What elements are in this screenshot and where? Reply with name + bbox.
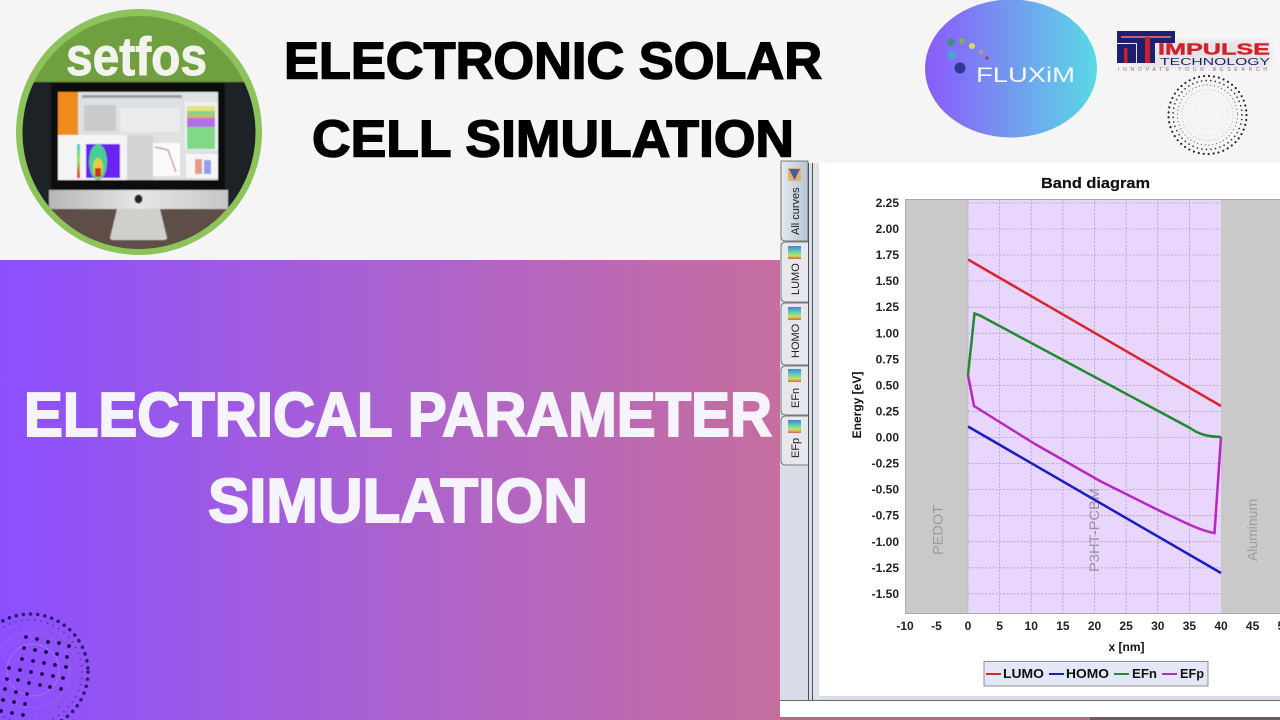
x axis tick labels: 40 [1214, 619, 1228, 633]
logo wordmark: setfos [66, 27, 207, 87]
curve: HOMO [968, 426, 1221, 573]
chart: band diagram [850, 175, 1280, 686]
monitor stand [110, 209, 167, 240]
icon: apple mark [134, 194, 142, 204]
tab: EFp [781, 416, 808, 465]
main heading: ELECTRICAL PARAMETER [24, 381, 772, 450]
monitor chin [49, 190, 228, 209]
logo: Fluxim oval: FLUXiM [976, 63, 1075, 87]
x axis tick labels: -5 [931, 619, 942, 633]
title [284, 32, 822, 168]
y axis tick labels: 0.00 [876, 430, 899, 444]
x axis tick labels: 45 [1246, 619, 1260, 633]
tab: LUMO: LUMO [790, 263, 802, 295]
x axis tick labels: 30 [1151, 619, 1165, 633]
y axis tick labels: -0.50 [872, 482, 899, 496]
y axis tick labels: 0.75 [876, 352, 899, 366]
purple gradient banner [0, 260, 780, 720]
logo: Fluxim oval [925, 0, 1097, 138]
tab: All curves: All curves [790, 187, 802, 235]
x axis tick labels: 0 [965, 619, 972, 633]
x axis tick labels: -10 [896, 619, 914, 633]
legend: LUMO [1003, 666, 1044, 681]
logo: Impulse Technology [1117, 31, 1271, 73]
y axis tick labels: -0.25 [872, 456, 899, 470]
y axis tick labels: 2.00 [876, 222, 899, 236]
tab: EFn: EFn [790, 388, 802, 408]
y axis tick labels: -1.00 [872, 535, 899, 549]
legend: EFp [1180, 666, 1204, 681]
logo: Impulse Technology: INNOVATE YOUR RESEARCH [1118, 67, 1267, 73]
layer: PEDOT region [906, 199, 968, 614]
panel: band diagram window [780, 161, 1280, 720]
y axis tick labels: 0.50 [876, 378, 899, 392]
y axis tick labels: 1.00 [876, 326, 899, 340]
main heading: SIMULATION [208, 467, 588, 536]
tab: HOMO [781, 303, 808, 365]
logo: Impulse Technology: IMPULSE [1158, 42, 1271, 58]
layer label: Aluminum: Aluminum [1244, 499, 1260, 561]
y axis tick labels: -0.75 [872, 508, 899, 522]
y axis tick labels: 1.75 [876, 248, 899, 262]
y axis tick labels [872, 196, 899, 601]
layer: P3HT-PCBM region [968, 199, 1221, 614]
decorative dotted rings: top right [1168, 76, 1246, 154]
x axis title: x [nm] [1108, 640, 1145, 654]
y axis title: Energy [eV] [850, 372, 864, 438]
x axis tick labels: 20 [1088, 619, 1101, 633]
legend [984, 662, 1208, 686]
x axis tick labels: 10 [1025, 619, 1038, 633]
legend: EFn [1132, 666, 1157, 681]
x axis tick labels: 5 [996, 619, 1003, 633]
x axis tick labels: 25 [1119, 619, 1133, 633]
y axis tick labels: 2.25 [876, 196, 899, 210]
title: CELL SIMULATION [312, 110, 794, 168]
logo: setfos monitor badge [16, 9, 262, 259]
y axis tick labels: -1.50 [872, 587, 899, 601]
layer label: P3HT-PCBM: P3HT-PCBM [1086, 488, 1102, 572]
curve: EFp [968, 375, 1221, 533]
x axis tick labels: 15 [1056, 619, 1070, 633]
x axis tick labels [896, 622, 1280, 630]
icon: monitor screen [51, 83, 225, 190]
tab: EFp: EFp [790, 438, 802, 458]
curve: EFn [968, 314, 1221, 437]
tab: EFn [781, 366, 808, 415]
tab: HOMO: HOMO [790, 323, 802, 358]
y axis tick labels: 1.25 [876, 300, 899, 314]
y axis tick labels: 0.25 [876, 404, 899, 418]
decorative dotted rings: bottom left [0, 614, 88, 720]
tab: All curves [781, 161, 808, 241]
logo: Impulse Technology: TECHNOLOGY [1160, 56, 1270, 68]
chart title: Band diagram [1041, 175, 1150, 192]
y axis tick labels: 1.50 [876, 274, 899, 288]
layer label: PEDOT: PEDOT [930, 505, 946, 555]
layer: Aluminum region [1221, 199, 1280, 614]
legend: HOMO [1066, 666, 1109, 681]
main heading [24, 381, 772, 536]
title: ELECTRONIC SOLAR [284, 32, 822, 90]
tab: LUMO [781, 242, 808, 302]
x axis tick labels: 35 [1183, 619, 1196, 633]
y axis tick labels: -1.25 [872, 561, 899, 575]
curve: LUMO [968, 260, 1221, 406]
